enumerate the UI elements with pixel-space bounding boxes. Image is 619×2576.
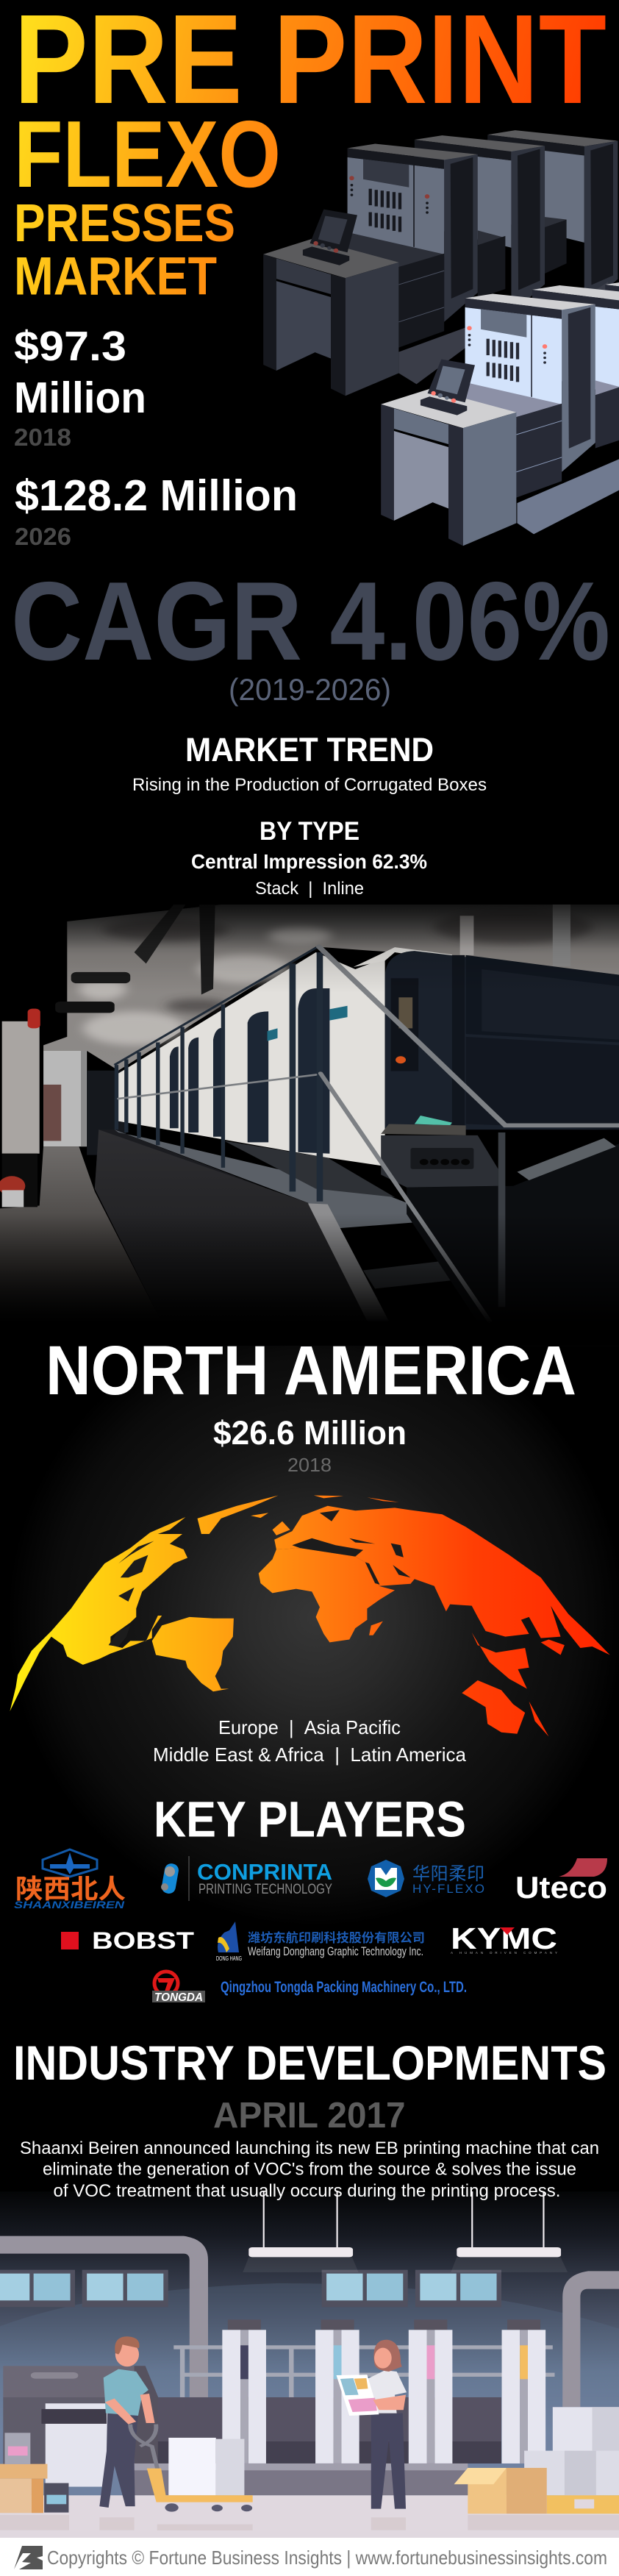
logo: KYMC: A HUMAN DRIVEN COMPANY xyxy=(451,1951,557,1955)
heading: north america: NORTH AMERICA xyxy=(46,1332,576,1410)
text: other regions: Europe | Asia Pacific xyxy=(218,1716,401,1738)
logo: Tongda xyxy=(152,1972,205,2004)
label: 2018: 2018 xyxy=(14,424,71,451)
stat: 2018 market size: Million xyxy=(14,374,146,422)
text: central impression share: Central Impression 62.3% xyxy=(191,850,427,873)
logo: Shaanxi Beiren: 陕西北人 xyxy=(15,1874,126,1904)
text: other regions xyxy=(153,1716,467,1766)
logo: HY-Flexo: 华阳柔印 xyxy=(412,1864,484,1884)
logo: Shaanxi Beiren xyxy=(14,1849,126,1910)
title: PRE PRINT FLEXO PRESSES MARKET: MARKET xyxy=(14,247,217,306)
label: 2018: 2018 xyxy=(287,1454,332,1476)
paragraph: development detail: Shaanxi Beiren announced launching its new EB printing machine that can xyxy=(20,2138,599,2158)
logo: Tongda: TONGDA xyxy=(154,1991,203,2004)
text: other regions: Middle East & Africa | Latin America xyxy=(153,1744,467,1766)
illustration: printing presses xyxy=(263,130,619,546)
map background glow xyxy=(0,1302,619,1934)
logo: Bobst: BOBST xyxy=(92,1927,195,1954)
text: Qingzhou Tongda: Qingzhou Tongda Packing Machinery Co., LTD. xyxy=(221,1979,467,1996)
logo: Weifang Donghang xyxy=(216,1922,425,1962)
stat: 2018 market size: $97.3 xyxy=(14,323,126,370)
factory illustration xyxy=(0,2191,619,2538)
logo: Conprinta: PRINTING TECHNOLOGY xyxy=(198,1882,332,1897)
stat: 2026 market size: $128.2 Million xyxy=(15,471,298,520)
title: PRE PRINT FLEXO PRESSES MARKET xyxy=(14,0,607,306)
title: PRE PRINT FLEXO PRESSES MARKET: PRESSES xyxy=(14,194,235,253)
woman with poster xyxy=(337,2340,407,2509)
boxes and stacks xyxy=(0,2407,619,2513)
logo: HY-Flexo xyxy=(368,1860,484,1897)
date: april 2017: APRIL 2017 xyxy=(213,2096,406,2136)
logo: Conprinta: CONPRINTA xyxy=(197,1859,332,1885)
logo: Weifang Donghang: DONG HANG xyxy=(216,1955,242,1962)
CAGR period: (2019-2026) xyxy=(229,672,391,707)
logo: Fortune Business Insights xyxy=(14,2546,43,2569)
man with pallet truck xyxy=(99,2336,253,2512)
stat: north america value: $26.6 Million xyxy=(213,1414,407,1452)
logo: Bobst xyxy=(61,1927,195,1954)
logo: KYMC: KYMC xyxy=(451,1922,557,1955)
footer bar xyxy=(0,2538,619,2576)
text: other types: Stack | Inline xyxy=(255,879,364,899)
paragraph: development detail xyxy=(20,2138,599,2201)
logo: HY-Flexo: HY-FLEXO xyxy=(412,1882,484,1896)
text: market trend detail: Rising in the Production of Corrugated Boxes xyxy=(132,775,487,795)
title: PRE PRINT FLEXO PRESSES MARKET: FLEXO xyxy=(14,101,281,207)
heading: by type: BY TYPE xyxy=(260,817,359,846)
logo: Shaanxi Beiren: SHAANXIBEIREN xyxy=(14,1899,125,1910)
logo: Conprinta xyxy=(160,1856,332,1901)
logo: Weifang Donghang: Weifang Donghang Graphic Technology Inc. xyxy=(248,1944,423,1958)
photo: printing press floor xyxy=(0,905,619,1346)
logo: Uteco xyxy=(515,1858,607,1905)
paragraph: development detail: eliminate the generation of VOC's from the source & solves the issue xyxy=(43,2159,576,2180)
logo: Uteco: Uteco xyxy=(515,1870,607,1905)
label: 2026: 2026 xyxy=(15,523,71,550)
logo: Weifang Donghang: 潍坊东航印刷科技股份有限公司 xyxy=(248,1930,425,1945)
world map xyxy=(10,1496,610,1737)
heading: market trend: MARKET TREND xyxy=(185,731,434,768)
heading: key players: KEY PLAYERS xyxy=(154,1791,466,1847)
stat: 2018 market size xyxy=(14,323,146,422)
paragraph: development detail: of VOC treatment that usually occurs during the printing process. xyxy=(53,2181,560,2201)
